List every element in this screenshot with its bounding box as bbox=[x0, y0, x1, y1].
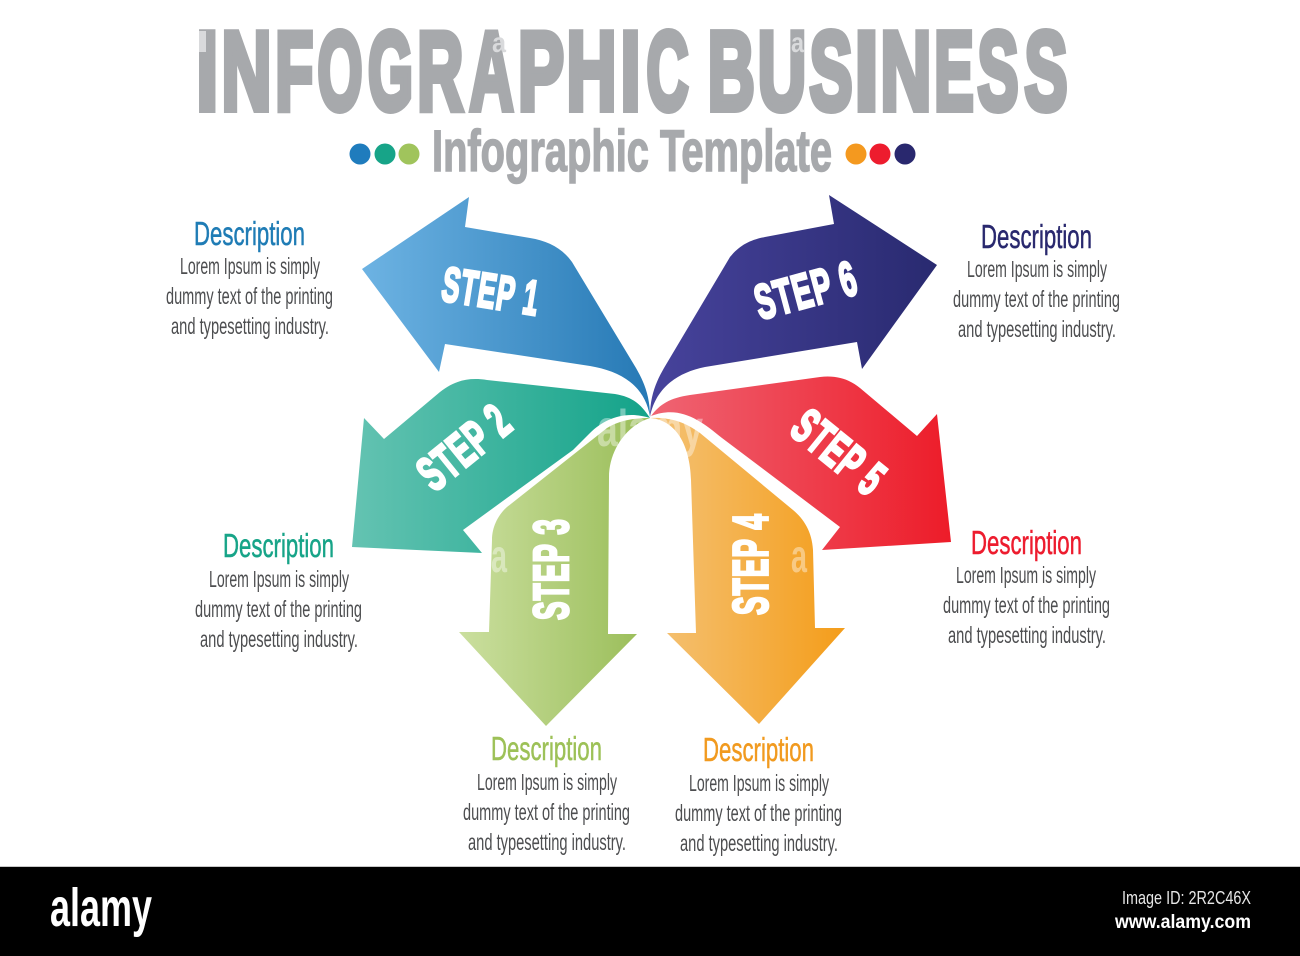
description: step 5: dummy text of the printing bbox=[943, 592, 1110, 618]
title: N bbox=[222, 10, 272, 134]
image id: Image ID: 2R2C46X bbox=[1122, 888, 1251, 908]
title: I bbox=[196, 10, 218, 134]
arrow: step 2 bbox=[352, 379, 650, 553]
arrow: step 3 bbox=[459, 418, 650, 726]
arrow: step 6 bbox=[650, 195, 937, 417]
title: S bbox=[978, 10, 1018, 134]
title: S bbox=[1024, 10, 1068, 134]
description: step 5 bbox=[943, 524, 1110, 648]
watermark letters: a bbox=[491, 530, 507, 582]
dots: right bbox=[846, 144, 916, 164]
arrow: step 5 bbox=[651, 377, 951, 550]
description: step 2: and typesetting industry. bbox=[200, 626, 358, 652]
watermark letters: alamy bbox=[597, 400, 703, 458]
step 5 label: STEP 5 bbox=[781, 399, 896, 506]
description: step 1 bbox=[166, 215, 333, 339]
website: www.alamy.com bbox=[1114, 912, 1251, 933]
step 4 label: STEP 4 bbox=[724, 513, 778, 615]
step 1 label: STEP 1 bbox=[438, 258, 543, 326]
description: step 3: and typesetting industry. bbox=[468, 829, 626, 855]
title: O bbox=[318, 10, 362, 134]
title watermark marks: a bbox=[791, 27, 804, 58]
description: step 4: Lorem Ipsum is simply bbox=[689, 770, 829, 796]
title: H bbox=[566, 10, 616, 134]
title: B bbox=[708, 10, 755, 134]
description: step 6 bbox=[953, 218, 1120, 342]
description: step 1: dummy text of the printing bbox=[166, 283, 333, 309]
description: step 2: dummy text of the printing bbox=[195, 596, 362, 622]
description: step 4 bbox=[675, 731, 842, 856]
description: step 1: Description bbox=[194, 215, 305, 252]
title: E bbox=[934, 10, 974, 134]
title: A bbox=[470, 10, 514, 134]
description: step 5: Lorem Ipsum is simply bbox=[956, 562, 1096, 588]
description: step 3 bbox=[463, 730, 630, 855]
footer logo: alamy bbox=[50, 878, 152, 938]
title: I bbox=[854, 10, 878, 134]
title: C bbox=[646, 10, 688, 134]
step 3 label: STEP 3 bbox=[525, 518, 579, 620]
description: step 3: dummy text of the printing bbox=[463, 799, 630, 825]
description: step 3: Description bbox=[491, 730, 602, 767]
description: step 2 bbox=[195, 527, 362, 652]
description: step 6: and typesetting industry. bbox=[958, 316, 1116, 342]
description: step 1: Lorem Ipsum is simply bbox=[180, 253, 320, 279]
step 6 label: STEP 6 bbox=[749, 251, 863, 331]
description: step 4: dummy text of the printing bbox=[675, 800, 842, 826]
description: step 2: Lorem Ipsum is simply bbox=[209, 566, 349, 592]
title: I bbox=[620, 10, 640, 134]
description: step 1: and typesetting industry. bbox=[171, 313, 329, 339]
title: S bbox=[810, 10, 852, 134]
description: step 5: Description bbox=[971, 524, 1082, 561]
title: R bbox=[417, 10, 463, 134]
watermark letters bbox=[491, 400, 807, 582]
description: step 2: Description bbox=[223, 527, 334, 564]
description: step 6: Description bbox=[981, 218, 1092, 255]
title: P bbox=[518, 10, 564, 134]
title watermark marks bbox=[199, 27, 804, 58]
title: G bbox=[368, 10, 413, 134]
arrow: step 1 bbox=[362, 197, 650, 417]
description: step 3: Lorem Ipsum is simply bbox=[477, 769, 617, 795]
step 2 label: STEP 2 bbox=[407, 394, 522, 501]
description: step 4: Description bbox=[703, 731, 814, 768]
description: step 6: dummy text of the printing bbox=[953, 286, 1120, 312]
description: step 4: and typesetting industry. bbox=[680, 830, 838, 856]
description: step 5: and typesetting industry. bbox=[948, 622, 1106, 648]
footer bar bbox=[0, 866, 1300, 956]
description: step 6: Lorem Ipsum is simply bbox=[967, 256, 1107, 282]
watermark letters: a bbox=[791, 530, 807, 582]
subtitle: Infographic Template bbox=[432, 119, 832, 184]
title: F bbox=[275, 10, 313, 134]
dots: left bbox=[350, 144, 420, 164]
title watermark marks: a bbox=[492, 27, 506, 58]
title: U bbox=[758, 10, 806, 134]
arrow: step 4 bbox=[650, 418, 845, 724]
title: N bbox=[880, 10, 931, 134]
